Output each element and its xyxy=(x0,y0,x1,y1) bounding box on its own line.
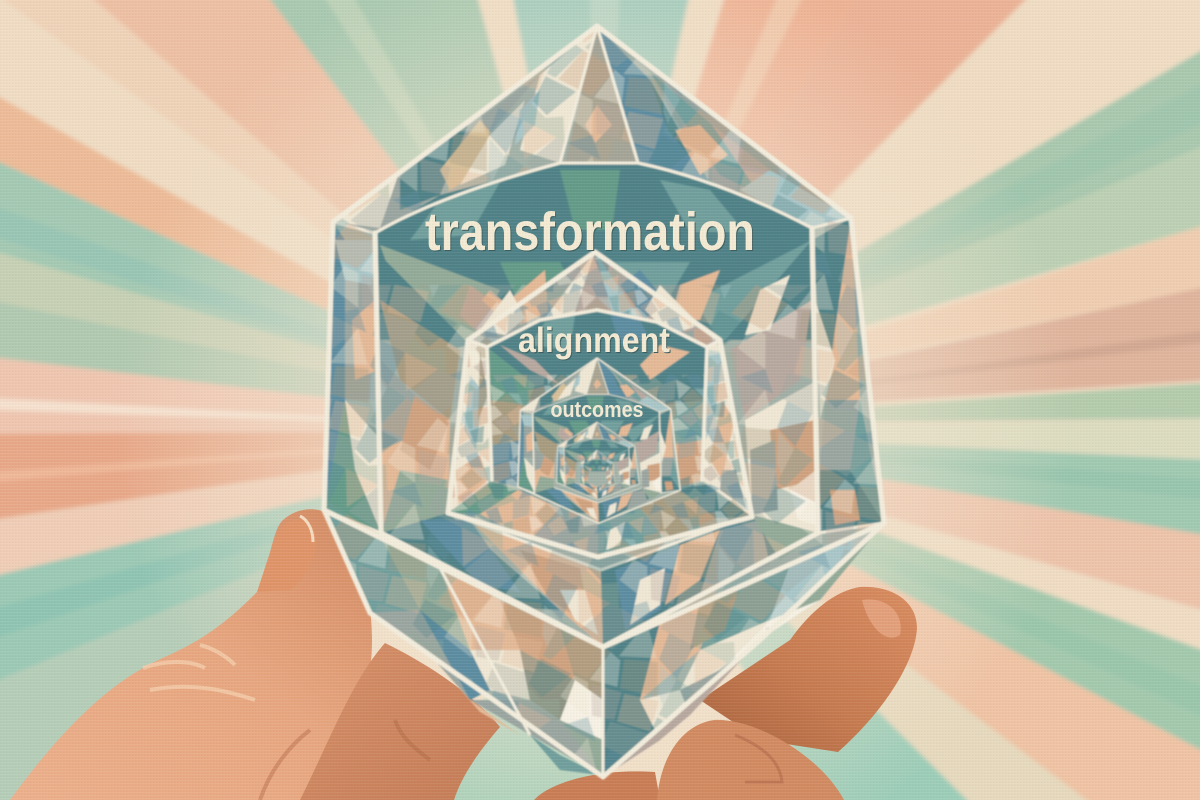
diamond: nested gem xyxy=(324,26,884,777)
outer gem mosaic reflections xyxy=(324,26,884,647)
label: alignment: alignment xyxy=(518,321,670,360)
gem layer: alignment xyxy=(448,252,752,557)
gem layer: transformation xyxy=(324,26,884,647)
label: outcomes: outcomes xyxy=(550,397,644,422)
gem layer: innermost nested xyxy=(580,450,615,492)
gem layer: outcomes xyxy=(518,358,680,523)
hand: right fingers xyxy=(534,587,917,800)
outer gem lower section xyxy=(324,510,884,777)
gem layer: fourth nested xyxy=(557,422,639,500)
label: transformation: transformation xyxy=(425,202,755,262)
hand: left thumb and palm xyxy=(10,509,500,800)
